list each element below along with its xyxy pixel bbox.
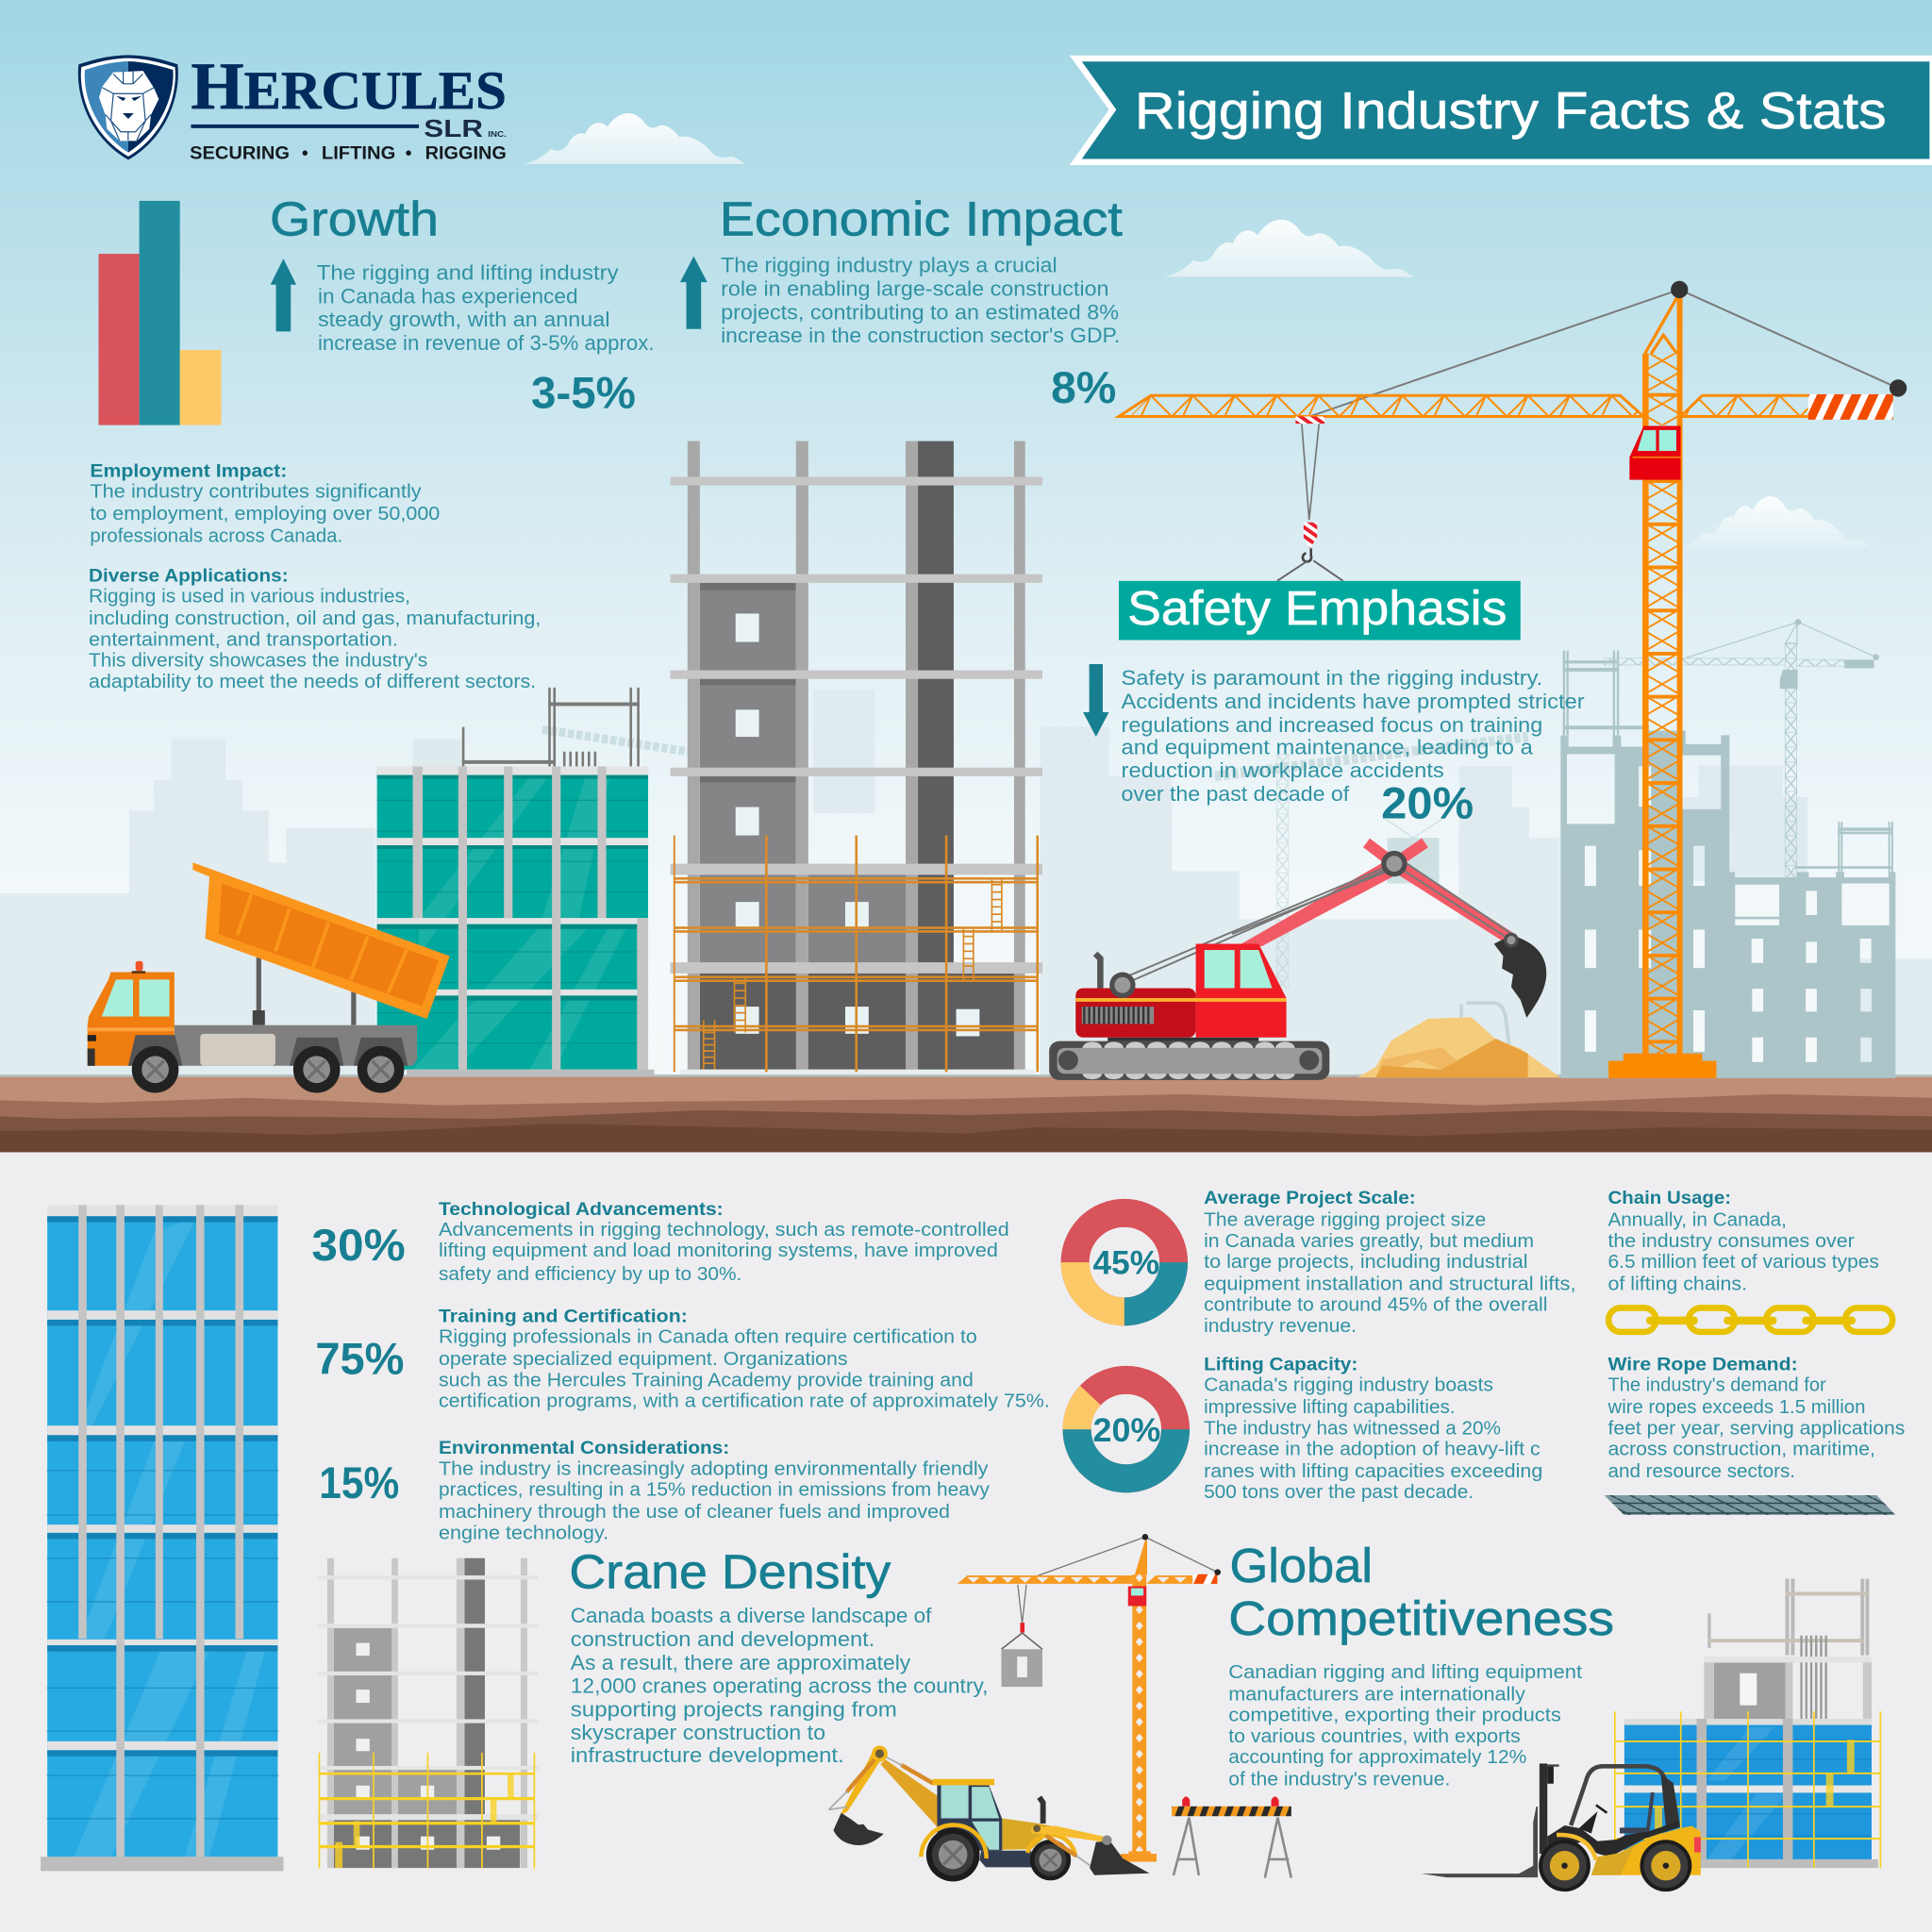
donut chart: 20%: 20% xyxy=(1093,1412,1160,1449)
panel: chain usage: Chain Usage: xyxy=(1607,1188,1731,1208)
panel: average project scale: in Canada varies greatly, but medium xyxy=(1204,1231,1534,1252)
cables xyxy=(1123,858,1516,983)
safety text: reduction in workplace accidents xyxy=(1122,758,1444,782)
cab xyxy=(932,1779,1002,1851)
crane density text: supporting projects ranging from xyxy=(571,1697,897,1721)
crane density text: construction and development. xyxy=(571,1627,874,1651)
yellow scaffolding on blue building xyxy=(1614,1711,1881,1868)
panel: employment impact: professionals across Canada. xyxy=(90,526,342,547)
panel: average project scale: equipment installation and structural lifts, xyxy=(1204,1274,1576,1295)
economic text xyxy=(721,254,1120,347)
safety text: over the past decade of xyxy=(1122,782,1350,806)
heading: growth: Growth xyxy=(270,192,439,245)
donut chart: 45%: 45% xyxy=(1093,1245,1159,1282)
mast and forks xyxy=(1422,1763,1559,1877)
panel: technological advancements: Advancements in rigging technology, such as remote-controlled xyxy=(439,1220,1009,1241)
heading: global competitiveness: Global xyxy=(1230,1539,1373,1592)
trolley xyxy=(1295,416,1324,424)
panel: technological advancements: safety and efficiency by up to 30%. xyxy=(439,1264,741,1285)
global text: manufacturers are internationally xyxy=(1228,1684,1525,1705)
panel: employment impact: The industry contributes significantly xyxy=(90,482,422,503)
counterweight xyxy=(1808,394,1893,420)
teal glass building xyxy=(377,766,655,1077)
logo tagline: SECURING xyxy=(190,143,290,163)
steering xyxy=(1579,1805,1607,1834)
icon: chain xyxy=(1608,1307,1892,1332)
exhaust xyxy=(1040,1797,1043,1824)
small cab xyxy=(1128,1587,1146,1606)
heading: safety emphasis: Safety Emphasis xyxy=(1127,581,1507,635)
sand pile xyxy=(1357,1003,1560,1077)
crane base xyxy=(1608,1054,1716,1078)
panel: average project scale xyxy=(1204,1188,1576,1337)
crane density text: skyscraper construction to xyxy=(571,1721,825,1744)
crane density text xyxy=(571,1604,989,1767)
logo wordmark: HERCULES xyxy=(191,50,507,124)
heading: global competitiveness: Competitiveness xyxy=(1228,1591,1614,1645)
panel: lifting capacity: impressive lifting capabilities. xyxy=(1204,1397,1456,1418)
panel: lifting capacity: ranes with lifting capacities exceeding xyxy=(1204,1461,1542,1482)
growth text xyxy=(317,260,655,355)
panel: chain usage xyxy=(1607,1188,1879,1295)
tower crane xyxy=(1119,281,1907,1078)
fenders xyxy=(921,1825,1075,1858)
panel: environmental considerations: machinery through the use of cleaner fuels and improved xyxy=(439,1502,950,1523)
growth text: in Canada has experienced xyxy=(318,284,578,308)
wheel arches xyxy=(128,1035,408,1066)
wheels xyxy=(926,1828,1071,1881)
panel: technological advancements xyxy=(439,1199,1009,1285)
boom top cross xyxy=(1366,842,1425,864)
yellow scaffolding on small building xyxy=(319,1753,535,1869)
panel: environmental considerations xyxy=(439,1438,990,1543)
blue glass tower xyxy=(41,1205,283,1871)
body xyxy=(1557,1826,1701,1875)
global text: to various countries, with exports xyxy=(1228,1726,1521,1747)
hanging load xyxy=(1001,1623,1042,1687)
panel: employment impact: Employment Impact: xyxy=(90,460,287,481)
global text xyxy=(1228,1662,1583,1790)
panel: average project scale: contribute to around 45% of the overall xyxy=(1204,1295,1547,1316)
panel: lifting capacity: The industry has witnessed a 20% xyxy=(1204,1418,1501,1439)
safety text: Safety is paramount in the rigging industry. xyxy=(1122,666,1542,690)
panel: average project scale: to large projects, including industrial xyxy=(1204,1252,1528,1273)
panel: diverse applications: including construction, oil and gas, manufacturing, xyxy=(89,608,541,629)
blue building under construction xyxy=(1624,1579,1878,1868)
safety text: regulations and increased focus on training xyxy=(1122,713,1542,737)
body xyxy=(1075,943,1287,1038)
panel: training and certification: operate specialized equipment. Organizations xyxy=(439,1349,848,1370)
panel: wire rope demand: The industry's demand for xyxy=(1607,1375,1826,1396)
title banner: Rigging Industry Facts & Stats xyxy=(1135,81,1887,140)
panel: diverse applications: entertainment, and transportation. xyxy=(89,629,398,650)
bar chart icon xyxy=(98,201,221,425)
crane density text: 12,000 cranes operating across the country, xyxy=(571,1674,989,1698)
logo shield xyxy=(78,55,178,159)
forklift wheels xyxy=(1539,1840,1691,1891)
cloud 1 xyxy=(524,113,745,164)
global text: of the industry's revenue. xyxy=(1228,1770,1450,1790)
panel: technological advancements: Technological Advancements: xyxy=(439,1199,724,1220)
panel: training and certification xyxy=(439,1306,1050,1412)
title banner xyxy=(1070,56,1932,165)
cloud 2 xyxy=(1163,220,1414,277)
panel: wire rope demand: feet per year, serving applications xyxy=(1607,1418,1905,1439)
panel: average project scale: industry revenue. xyxy=(1204,1316,1357,1337)
rooftop frames xyxy=(1563,651,1893,873)
panel: technological advancements: lifting equipment and load monitoring systems, have improved xyxy=(439,1241,998,1261)
rear arm xyxy=(828,1746,937,1827)
safety text: Accidents and incidents have prompted stricter xyxy=(1122,690,1585,713)
arrow: up xyxy=(680,257,708,329)
panel: lifting capacity: 500 tons over the past decade. xyxy=(1204,1482,1474,1503)
small jib xyxy=(958,1574,1217,1584)
logo tagline: • xyxy=(302,143,308,163)
panel: economic impact xyxy=(680,192,1123,412)
floor xyxy=(1547,1821,1680,1857)
icon: wire rope xyxy=(1605,1495,1895,1515)
forklift xyxy=(1422,1763,1701,1891)
arrow: down xyxy=(1083,664,1109,737)
boom xyxy=(1237,863,1397,946)
panel: chain usage: of lifting chains. xyxy=(1607,1274,1747,1295)
seat xyxy=(1620,1792,1653,1834)
chassis xyxy=(175,1025,417,1066)
jib xyxy=(1119,395,1808,416)
panel: diverse applications: This diversity showcases the industry's xyxy=(89,651,427,672)
panel: global competitiveness xyxy=(1228,1539,1614,1790)
crane density text: infrastructure development. xyxy=(571,1743,844,1767)
panel: environmental considerations: engine technology. xyxy=(439,1523,608,1543)
panel: diverse applications: Rigging is used in various industries, xyxy=(89,587,410,608)
panel: average project scale: The average rigging project size xyxy=(1204,1210,1486,1231)
dipper arm xyxy=(1389,860,1517,943)
panel: wire rope demand: across construction, maritime, xyxy=(1607,1440,1875,1460)
panel: training and certification: certification programs, with a certification rate of approximately 75%. xyxy=(439,1391,1050,1412)
silhouette building right xyxy=(1560,651,1895,1078)
cab xyxy=(88,961,175,1066)
road barricade xyxy=(1172,1796,1291,1878)
hydraulic rods xyxy=(253,958,356,1025)
front arm xyxy=(1031,1826,1104,1842)
operator cab xyxy=(1629,426,1681,480)
stat: 15%: 15% xyxy=(319,1457,399,1507)
safety text: and equipment maintenance, leading to a xyxy=(1122,735,1534,758)
hood xyxy=(1002,1818,1057,1850)
panel: environmental considerations: practices, resulting in a 15% reduction in emissions from heavy xyxy=(439,1480,990,1501)
panel: wire rope demand: wire ropes exceeds 1.5 million xyxy=(1607,1397,1865,1418)
logo xyxy=(78,50,507,163)
panel: environmental considerations: The industry is increasingly adopting environmentally friendly xyxy=(439,1458,989,1479)
global text: competitive, exporting their products xyxy=(1228,1706,1561,1726)
panel: training and certification: such as the Hercules Training Academy provide training and xyxy=(439,1370,974,1391)
stat: 3-5%: 3-5% xyxy=(531,367,636,417)
crane density text: As a result, there are approximately xyxy=(571,1651,910,1674)
small gray building xyxy=(317,1558,539,1868)
donut chart: 20% xyxy=(1077,1380,1175,1478)
small tower crane xyxy=(958,1534,1221,1862)
bucket xyxy=(1494,933,1546,1018)
panel: lifting capacity xyxy=(1204,1354,1542,1503)
faded background crane right xyxy=(1604,619,1879,878)
fuel tank xyxy=(200,1034,275,1066)
sky background xyxy=(0,0,1932,1084)
panel: employment impact: to employment, employing over 50,000 xyxy=(90,504,440,525)
economic text: projects, contributing to an estimated 8% xyxy=(721,300,1119,324)
faded city skyline xyxy=(0,690,1932,1078)
logo tagline: RIGGING xyxy=(425,143,507,163)
tracks xyxy=(1049,1038,1329,1080)
mast xyxy=(1642,293,1683,1056)
global text: accounting for approximately 12% xyxy=(1228,1747,1527,1768)
lower section background xyxy=(0,1152,1932,1932)
safety text xyxy=(1122,666,1585,806)
rear bucket xyxy=(833,1813,884,1845)
crane density text: Canada boasts a diverse landscape of xyxy=(571,1604,932,1627)
growth text: steady growth, with an annual xyxy=(318,308,610,331)
front bucket xyxy=(1090,1841,1149,1875)
logo: INC. xyxy=(488,129,507,139)
panel: diverse applications: Diverse Applications: xyxy=(89,565,289,586)
cloud 3 xyxy=(1681,496,1872,547)
cage xyxy=(1571,1766,1679,1827)
panel: diverse applications: adaptability to meet the needs of different sectors. xyxy=(89,672,536,692)
stat: 20%: 20% xyxy=(1381,777,1474,827)
backhoe loader xyxy=(828,1746,1149,1881)
panel: chain usage: 6.5 million feet of various types xyxy=(1607,1252,1879,1273)
crawler excavator xyxy=(1049,842,1546,1080)
panel: safety emphasis xyxy=(1083,581,1585,827)
panel: chain usage: the industry consumes over xyxy=(1607,1231,1855,1252)
stats column xyxy=(311,1220,406,1507)
hook cables xyxy=(1302,424,1319,520)
small mast xyxy=(1132,1574,1146,1854)
growth text: increase in revenue of 3-5% approx. xyxy=(318,331,655,355)
logo tagline: • xyxy=(406,143,412,163)
heading: crane density: Crane Density xyxy=(569,1545,891,1599)
donut chart: 45% xyxy=(1075,1213,1174,1311)
stat: 30%: 30% xyxy=(311,1220,406,1270)
panel: lifting capacity: Canada's rigging industry boasts xyxy=(1204,1375,1493,1396)
panel: environmental considerations: Environmental Considerations: xyxy=(439,1438,729,1458)
heading: economic impact: Economic Impact xyxy=(720,192,1123,245)
economic text: role in enabling large-scale construction xyxy=(721,276,1109,300)
heading: global competitiveness xyxy=(1228,1539,1614,1645)
arrow: up xyxy=(271,258,296,331)
growth text: The rigging and lifting industry xyxy=(317,260,619,284)
panel: lifting capacity: increase in the adoption of heavy-lift c xyxy=(1204,1440,1541,1460)
economic text: The rigging industry plays a crucial xyxy=(721,254,1058,277)
pulleys xyxy=(1109,851,1407,998)
lion head xyxy=(99,71,158,141)
panel: chain usage: Annually, in Canada, xyxy=(1607,1210,1787,1231)
panel: training and certification: Rigging professionals in Canada often require certification to xyxy=(439,1327,977,1348)
logo tagline xyxy=(190,143,507,163)
dump bed xyxy=(192,862,450,1019)
crane ties xyxy=(1309,290,1898,416)
panel: wire rope demand: Wire Rope Demand: xyxy=(1607,1354,1798,1374)
gray concrete building xyxy=(671,441,1042,1074)
faded background crane left xyxy=(542,729,688,752)
logo tagline: LIFTING xyxy=(322,143,395,163)
panel: wire rope demand: and resource sectors. xyxy=(1607,1461,1795,1482)
panel: lifting capacity: Lifting Capacity: xyxy=(1204,1354,1357,1374)
global text: Canadian rigging and lifting equipment xyxy=(1228,1662,1583,1683)
chassis xyxy=(979,1851,1031,1867)
panel: wire rope demand xyxy=(1607,1354,1905,1482)
panel: average project scale: Average Project Scale: xyxy=(1204,1188,1416,1208)
stat: 75%: 75% xyxy=(315,1333,404,1383)
ground xyxy=(0,1074,1932,1152)
wheels xyxy=(132,1046,404,1093)
tie balls xyxy=(1671,281,1907,397)
logo: SLR xyxy=(424,114,483,142)
panel: training and certification: Training and Certification: xyxy=(439,1306,688,1326)
hook xyxy=(1277,523,1343,581)
panel: crane density xyxy=(569,1545,989,1767)
orange scaffolding xyxy=(674,836,1039,1072)
rooftop frame on teal building xyxy=(462,688,640,766)
dump truck xyxy=(88,862,450,1093)
panel: diverse applications xyxy=(89,565,541,692)
stat: 8%: 8% xyxy=(1051,362,1116,412)
panel: growth xyxy=(270,192,655,417)
faded background crane middle xyxy=(1215,737,1528,989)
panel: employment impact xyxy=(90,460,440,547)
economic text: increase in the construction sector's GDP. xyxy=(721,324,1120,347)
